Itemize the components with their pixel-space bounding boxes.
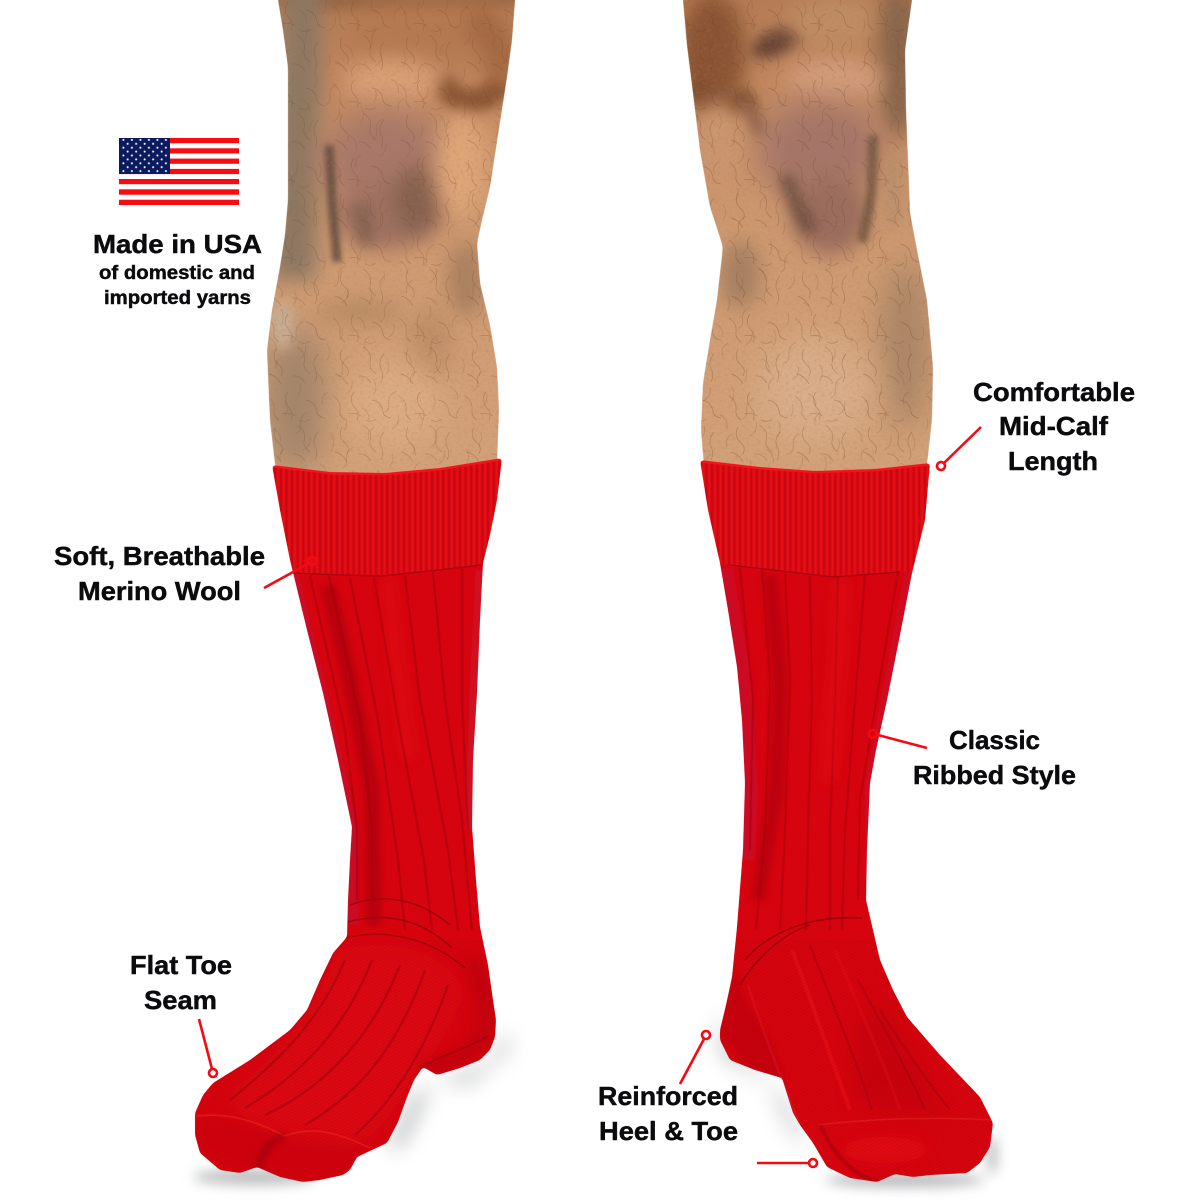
- left sock: ankle folds: [345, 899, 465, 968]
- right sock: [700, 460, 993, 1182]
- left sock: foot shading and ribs: [190, 940, 500, 1185]
- callout: merino wool: Merino Wool: [78, 576, 241, 606]
- callout: ribbed style: [869, 725, 1076, 790]
- callout: mid-calf length: [937, 377, 1135, 476]
- icon: US flag: [119, 138, 239, 205]
- callout: merino wool: [54, 541, 316, 606]
- callout: reinforced heel and toe: [598, 1031, 817, 1167]
- right leg: [683, 0, 934, 471]
- callout: reinforced heel and toe: Heel & Toe: [599, 1116, 738, 1146]
- callout: flat toe seam: Flat Toe: [130, 950, 232, 980]
- callout: flat toe seam: [130, 950, 232, 1077]
- callout: merino wool: Soft, Breathable: [54, 541, 265, 571]
- label: made in USA: of domestic and: [99, 262, 255, 284]
- callout: reinforced heel and toe: Reinforced: [598, 1081, 738, 1111]
- left sock: leg ribs: [290, 568, 480, 930]
- left leg: [267, 0, 516, 473]
- right sock: leg ribs: [725, 568, 910, 930]
- callout: ribbed style: Ribbed Style: [913, 760, 1076, 790]
- right sock: cuff: [700, 460, 930, 578]
- label: made in USA: [93, 229, 262, 309]
- shadow: right foot: [716, 1010, 998, 1187]
- callout: mid-calf length: Mid-Calf: [999, 411, 1108, 441]
- left sock: [194, 458, 502, 1182]
- label: made in USA: Made in USA: [93, 229, 262, 259]
- shadow: left foot: [193, 1030, 510, 1185]
- callout: mid-calf length: Length: [1008, 446, 1098, 476]
- right sock: ankle fold: [740, 918, 862, 985]
- label: made in USA: imported yarns: [104, 287, 251, 309]
- left sock: cuff: [272, 458, 502, 577]
- callout: flat toe seam: Seam: [144, 985, 217, 1015]
- callout: ribbed style: Classic: [949, 725, 1040, 755]
- right sock: foot shading and ribs: [715, 940, 1000, 1185]
- callout: mid-calf length: Comfortable: [973, 377, 1135, 407]
